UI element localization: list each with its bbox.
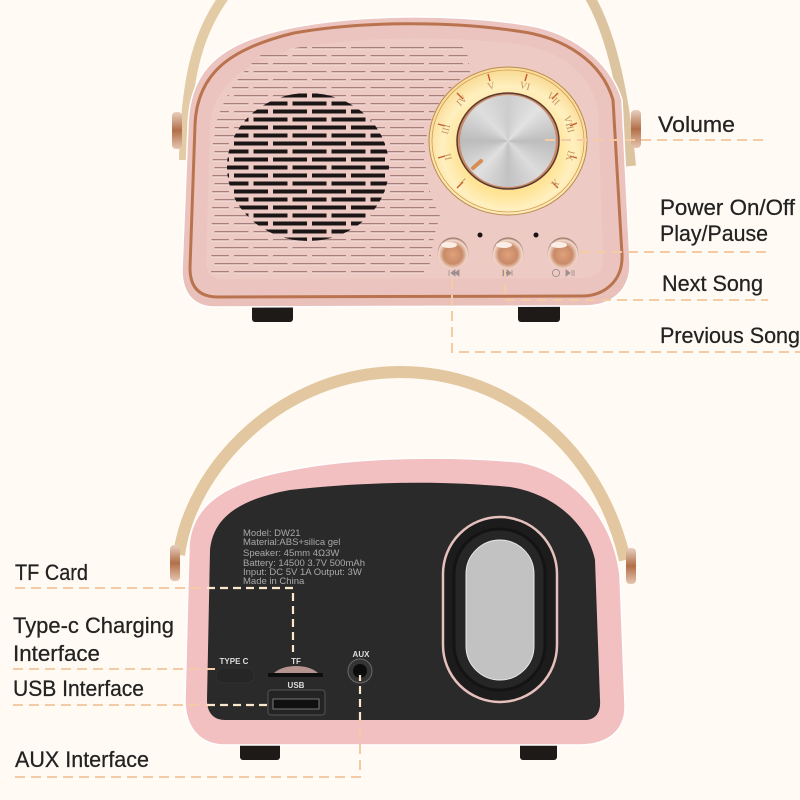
dial numerals: I [458, 176, 468, 186]
dial numerals: II [442, 152, 455, 161]
callout: AUX Interface [15, 675, 360, 777]
glowing dial ring [429, 67, 587, 215]
grille slats [211, 47, 470, 274]
dial numerals: X [548, 176, 561, 190]
callout: USB Interface: USB Interface [13, 676, 144, 701]
dial [429, 67, 587, 215]
dial numerals: VI [518, 80, 531, 93]
radiator groove [454, 529, 545, 690]
front view speaker [172, 0, 641, 322]
side studs: front [172, 110, 641, 149]
callout: Type-c Charging Interface: Type-c Charging [13, 613, 174, 638]
specification text: Input: DC 5V 1A Output: 3W [243, 567, 362, 578]
callout: TF Card: TF Card [15, 560, 88, 585]
port: TF [268, 657, 323, 677]
callout: AUX Interface: AUX Interface [15, 747, 149, 772]
dial numerals [440, 80, 576, 190]
callout: Previous Song: Previous Song [660, 323, 800, 348]
specification text: Model: DW21 [243, 528, 301, 539]
feet: back [240, 742, 557, 760]
handle: front [184, 0, 631, 166]
dial numerals: IX [563, 149, 576, 163]
port: AUX [348, 650, 372, 683]
LED dots [478, 232, 538, 238]
specification text: Made in China [243, 576, 305, 587]
side studs: back [170, 545, 636, 584]
silver knob face [460, 95, 556, 187]
recessed front panel [206, 38, 603, 279]
callout: Volume: Volume [658, 112, 735, 137]
button icons [449, 269, 574, 277]
callout: Previous Song [452, 279, 800, 352]
specification text [243, 528, 365, 587]
dial numerals: VIII [561, 115, 576, 134]
dial numerals: V [486, 80, 497, 93]
speaker body: back [185, 458, 625, 745]
dial numerals: III [440, 123, 453, 136]
specification text: Speaker: 45mm 4Ω3W [243, 548, 339, 559]
callout: Power On/Off Play/Pause [580, 195, 796, 252]
port: TF: TF [291, 657, 301, 666]
callout: Next Song [505, 268, 768, 300]
knob bezel [457, 93, 559, 189]
radiator ring [443, 517, 557, 702]
knob indicator [473, 161, 481, 168]
specification text: Battery: 14500 3.7V 500mAh [243, 558, 365, 569]
specification text: Material:ABS+silica gel [243, 537, 340, 548]
callout: TF Card [15, 560, 293, 652]
control buttons [438, 238, 578, 268]
callout: Next Song: Next Song [662, 271, 763, 296]
port: USB: USB [288, 681, 305, 690]
port: Type-C: TYPE C [220, 657, 249, 666]
port: USB [268, 681, 325, 715]
driver holes [227, 93, 389, 241]
speaker grille [211, 47, 470, 274]
black back panel [207, 483, 600, 720]
port: AUX: AUX [353, 650, 370, 659]
copper trim [190, 24, 622, 297]
handle: back [179, 372, 625, 560]
callout: Type-c Charging Interface [13, 613, 215, 669]
passive radiator [443, 517, 557, 702]
dial numerals: IV [455, 93, 470, 109]
speaker body: front [182, 17, 630, 307]
callout: Power On/Off Play/Pause: Play/Pause [660, 221, 768, 246]
silver plate [466, 540, 534, 680]
callout: Power On/Off Play/Pause: Power On/Off [660, 195, 796, 220]
feet: front [252, 303, 560, 322]
callout: Type-c Charging Interface: Interface [13, 641, 100, 666]
dial ticks [438, 74, 577, 188]
port: Type-C [216, 657, 254, 683]
dial numerals: VII [544, 90, 562, 108]
